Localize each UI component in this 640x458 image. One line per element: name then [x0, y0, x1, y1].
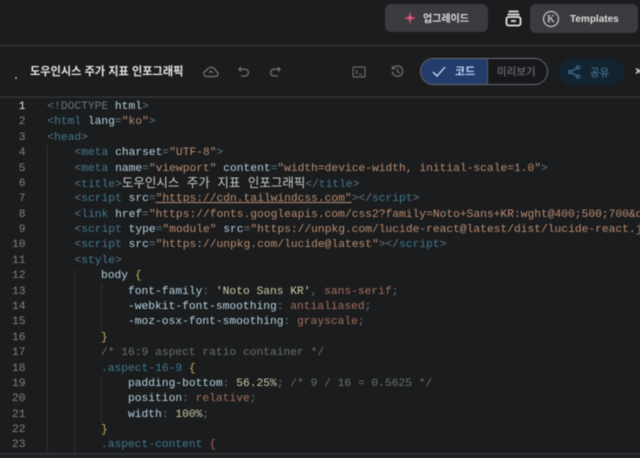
line numbers: 2: [19, 116, 26, 128]
line numbers: 1: [19, 101, 26, 113]
line numbers: 5: [19, 162, 26, 174]
code text: width: 100%;: [128, 409, 209, 421]
code text: /* 16:9 aspect ratio container */: [101, 347, 324, 359]
code text: [47, 100, 640, 451]
templates label: Templates: [570, 14, 619, 25]
code text: }: [101, 332, 108, 344]
code text: <script type="module" src="https://unpkg.com/lucide-react@latest/dist/lucide-react.js": [74, 224, 640, 236]
icon: undo: [238, 66, 250, 78]
code text: .aspect-content {: [101, 439, 216, 451]
line numbers: 12: [12, 270, 26, 282]
upgrade label: 업그레이드: [423, 14, 469, 25]
code preview toggle: [420, 58, 548, 85]
code text: <meta charset="UTF-8">: [74, 147, 223, 159]
icon: sparkle: [404, 12, 416, 24]
code text: }: [101, 424, 108, 436]
code text: body {: [101, 270, 142, 282]
upgrade button: [385, 4, 488, 32]
code text: padding-bottom: 56.25%; /* 9 / 16 = 0.5625 */: [128, 378, 432, 390]
icon: cloud: [202, 66, 220, 78]
code text: position: relative;: [128, 393, 256, 405]
icon: terminal: [352, 66, 366, 78]
share label: 공유: [590, 67, 609, 79]
code text: <meta name="viewport" content="width=device-width, initial-scale=1.0">: [74, 162, 548, 174]
code text: <style>: [74, 255, 122, 267]
icon: redo: [270, 66, 282, 78]
line numbers: 8: [19, 209, 26, 221]
top bar: [0, 0, 640, 46]
line numbers: 9: [19, 224, 26, 236]
code text: <head>: [47, 132, 88, 144]
share button: [558, 59, 624, 85]
preview label: 미리보기: [497, 66, 536, 78]
line numbers: 22: [12, 424, 26, 436]
line numbers: 17: [12, 347, 26, 359]
line numbers: 7: [19, 193, 26, 205]
icon: K avatar: [543, 11, 559, 27]
line numbers: 21: [12, 409, 26, 421]
code text: <script src="https://unpkg.com/lucide@latest"></script>: [74, 239, 446, 251]
toolbar: [0, 46, 640, 98]
document title: 도우인시스 주가 지표 인포그래픽: [30, 66, 183, 78]
code editor: [47, 146, 102, 452]
line numbers: 20: [12, 393, 26, 405]
line numbers: 14: [12, 301, 26, 313]
dot: [15, 77, 17, 79]
icon: check: [432, 66, 446, 78]
icon: share: [567, 64, 581, 80]
line numbers: 10: [12, 239, 26, 251]
line numbers: 15: [12, 316, 26, 328]
line numbers: 18: [12, 362, 26, 374]
icon: history: [391, 64, 404, 78]
line numbers: 13: [12, 286, 26, 298]
code text: <!DOCTYPE html>: [47, 101, 149, 113]
code text: <title>도우인시스 주가 지표 인포그래픽</title>: [74, 177, 359, 191]
code text: -moz-osx-font-smoothing: grayscale;: [128, 316, 365, 328]
line numbers: 4: [19, 147, 26, 159]
icon: archive box: [504, 10, 522, 28]
code text: <html lang="ko">: [47, 116, 156, 128]
line numbers: 6: [19, 178, 26, 190]
code label: 코드: [455, 66, 475, 78]
line numbers: 3: [19, 132, 26, 144]
code tab active: [421, 59, 488, 84]
templates button: [530, 4, 638, 33]
code text: -webkit-font-smoothing: antialiased;: [128, 301, 371, 313]
line numbers: 23: [12, 439, 26, 451]
line numbers: 16: [12, 332, 26, 344]
code text: <script src="https://cdn.tailwindcss.com"></script>: [74, 193, 419, 205]
code text: .aspect-16-9 {: [101, 362, 196, 374]
code text: font-family: 'Noto Sans KR', sans-serif;: [128, 286, 398, 298]
line numbers: 19: [12, 378, 26, 390]
bottom edge: [0, 453, 640, 458]
line numbers: [12, 100, 26, 451]
line numbers: 11: [12, 255, 26, 267]
icon: K avatar: K: [547, 13, 555, 25]
